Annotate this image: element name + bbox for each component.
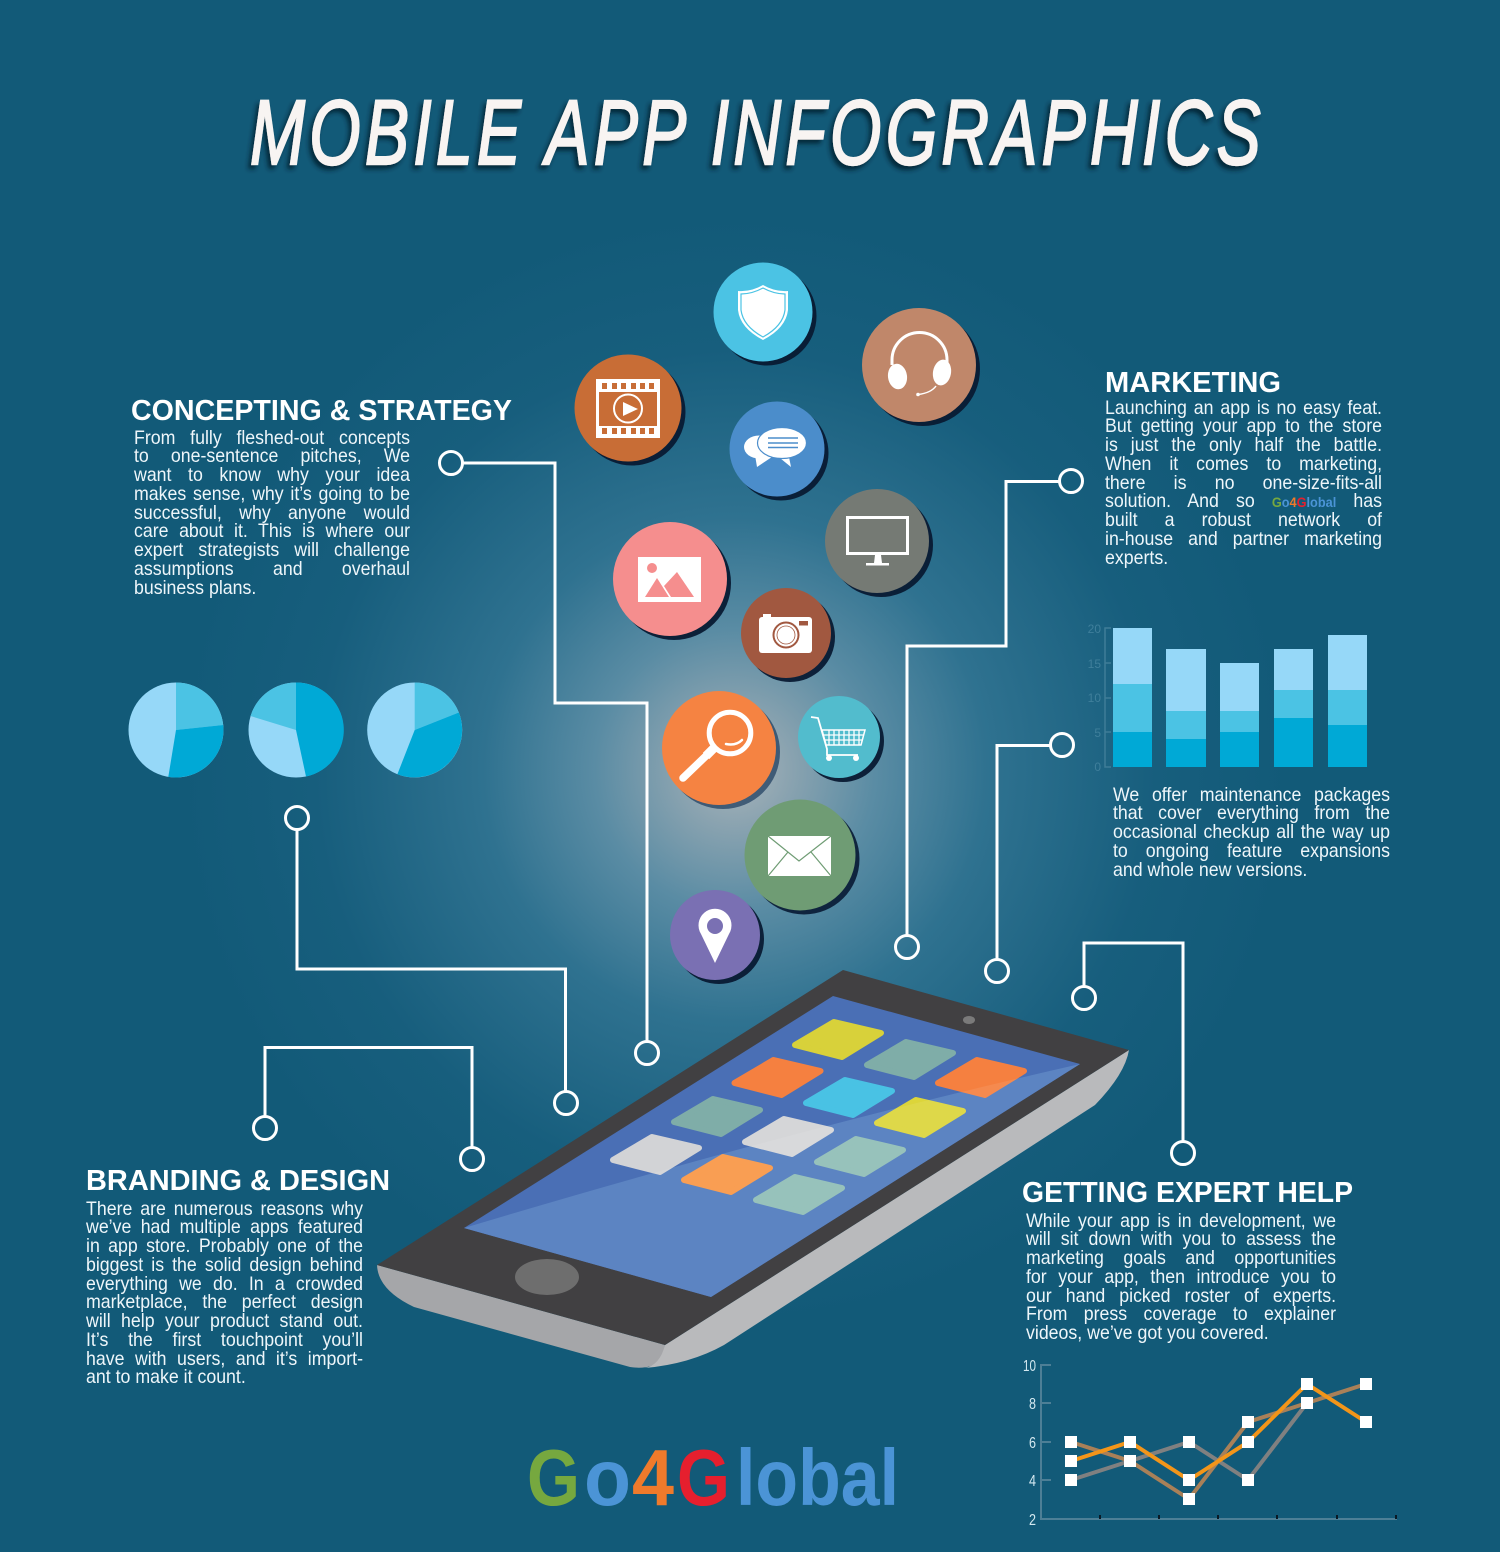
phone screen bbox=[464, 996, 1080, 1297]
text: marketing: experts. bbox=[1105, 546, 1168, 568]
text: branding and design: in app store. Probably one of the bbox=[86, 1235, 363, 1257]
connector: concepting to phone bbox=[440, 452, 658, 1064]
text: concepting and strategy: expert strategists will challenge bbox=[134, 539, 410, 561]
heading: marketing: MARKETING bbox=[1105, 367, 1281, 399]
text: getting expert help: While your app is in development, we bbox=[1026, 1210, 1336, 1232]
text: maintenance packages: to ongoing feature expansions bbox=[1113, 840, 1390, 862]
pie charts bbox=[128, 682, 462, 778]
stacked bar chart: 10 bbox=[1088, 691, 1101, 705]
icon: magnifier bbox=[662, 691, 780, 809]
icon: envelope bbox=[744, 800, 860, 914]
text: marketing: in-house and partner marketing bbox=[1105, 528, 1382, 550]
text: branding and design: will help your product stand out. bbox=[86, 1310, 363, 1332]
screen glare bbox=[464, 1064, 1080, 1297]
text: branding and design: marketplace, the perfect design bbox=[86, 1291, 363, 1313]
pie 3 bbox=[367, 682, 462, 778]
text: maintenance packages: and whole new versions. bbox=[1113, 858, 1307, 880]
text: getting expert help: our hand picked roster of experts. bbox=[1026, 1284, 1336, 1306]
stacked bar chart: 15 bbox=[1088, 657, 1101, 671]
text: marketing: Launching an app is no easy feat. bbox=[1105, 396, 1382, 418]
text: branding and design: It’s the first touchpoint you’ll bbox=[86, 1329, 363, 1351]
stacked bar chart bbox=[1088, 622, 1367, 774]
text: maintenance packages: occasional checkup all the way up bbox=[1113, 821, 1390, 843]
icon: chat bubbles bbox=[730, 402, 828, 500]
phone side: front edge bbox=[377, 1265, 665, 1368]
icon: shopping cart bbox=[798, 696, 884, 782]
connector: maintenance to phone bbox=[986, 734, 1074, 982]
text: getting expert help: marketing goals and opportunities bbox=[1026, 1247, 1336, 1269]
text: concepting and strategy: want to know why your idea bbox=[134, 464, 410, 486]
line chart: 6 bbox=[1029, 1435, 1036, 1452]
screen lower lit area bbox=[464, 1064, 1080, 1297]
connector: branding to phone bbox=[254, 1048, 484, 1170]
text: branding and design: biggest is the solid design behind bbox=[86, 1254, 363, 1276]
logo: Go4Global: G bbox=[527, 1433, 580, 1522]
connector: marketing to phone bbox=[896, 470, 1082, 958]
phone face bbox=[377, 970, 1129, 1345]
icon: headset bbox=[862, 308, 980, 426]
icon: shield bbox=[714, 262, 816, 366]
text: concepting and strategy: to one-sentence pitches, We bbox=[134, 445, 410, 467]
heading: getting expert help: GETTING EXPERT HELP bbox=[1022, 1177, 1353, 1209]
text: getting expert help: for your app, then introduce you to bbox=[1026, 1266, 1336, 1288]
icon: location pin bbox=[670, 890, 764, 984]
logo: Go4Global: 4 bbox=[632, 1433, 674, 1522]
line chart bbox=[1023, 1358, 1397, 1529]
text: marketing: solution. And so Go4Global has bbox=[1105, 490, 1382, 512]
text: getting expert help bbox=[1026, 1210, 1336, 1344]
logo: Go4Global: G bbox=[677, 1433, 730, 1522]
text: branding and design: There are numerous reasons why bbox=[86, 1198, 363, 1220]
icon: film bbox=[574, 354, 686, 466]
text: concepting and strategy: assumptions and overhaul bbox=[134, 558, 410, 580]
text: marketing: But getting your app to the store bbox=[1105, 415, 1382, 437]
heading: branding and design: BRANDING & DESIGN bbox=[86, 1165, 390, 1197]
text: marketing: built a robust network of bbox=[1105, 509, 1382, 531]
connector: pie charts to phone bbox=[286, 806, 578, 1114]
text: concepting and strategy: makes sense, why it’s going to be bbox=[134, 483, 410, 505]
phone side: right edge bbox=[645, 1050, 1129, 1368]
text: getting expert help: videos, we’ve got you covered. bbox=[1026, 1322, 1269, 1344]
front camera bbox=[963, 1016, 975, 1024]
logo: Go4Global bbox=[527, 1433, 899, 1522]
text: concepting and strategy: business plans. bbox=[134, 576, 256, 598]
text: concepting and strategy bbox=[134, 426, 410, 598]
line chart: 2 bbox=[1029, 1512, 1036, 1529]
text: getting expert help: From press coverage to explainer bbox=[1026, 1303, 1336, 1325]
text: concepting and strategy: care about it. This is where our bbox=[134, 520, 410, 542]
text: maintenance packages: We offer maintenance packages bbox=[1113, 784, 1390, 806]
text: concepting and strategy: From fully fleshed-out concepts bbox=[134, 426, 410, 448]
stacked bar chart: 20 bbox=[1088, 622, 1101, 636]
app tiles bbox=[613, 1022, 1024, 1212]
text: maintenance packages bbox=[1113, 784, 1390, 880]
text: marketing: there is no one-size-fits-all bbox=[1105, 472, 1382, 494]
text: branding and design bbox=[86, 1198, 363, 1388]
text: maintenance packages: that cover everything from the bbox=[1113, 802, 1390, 824]
pie 2 bbox=[248, 682, 344, 778]
text: concepting and strategy: successful, why anyone would bbox=[134, 502, 410, 524]
stacked bar chart: 0 bbox=[1094, 760, 1101, 774]
line chart: 10 bbox=[1023, 1358, 1036, 1375]
text: branding and design: have with users, and it’s import- bbox=[86, 1348, 363, 1370]
pie 1 bbox=[128, 682, 224, 778]
phone illustration bbox=[377, 970, 1129, 1368]
home button bbox=[515, 1259, 579, 1295]
logo: Go4Global: lobal bbox=[736, 1433, 899, 1522]
line chart: 8 bbox=[1029, 1396, 1036, 1413]
text: getting expert help: will sit down with you to assess the bbox=[1026, 1228, 1336, 1250]
logo: Go4Global: o bbox=[584, 1433, 631, 1522]
text: branding and design: we’ve had multiple apps featured bbox=[86, 1216, 363, 1238]
icon: picture bbox=[613, 522, 731, 640]
text: branding and design: ant to make it count. bbox=[86, 1366, 246, 1388]
connector: expert help to phone bbox=[1072, 943, 1194, 1164]
heading: concepting and strategy: CONCEPTING & STRATEGY bbox=[131, 395, 512, 427]
icon: monitor bbox=[825, 489, 933, 597]
text: marketing bbox=[1105, 396, 1382, 568]
text: marketing: When it comes to marketing, bbox=[1105, 453, 1382, 475]
icon: camera bbox=[741, 588, 835, 682]
stacked bar chart: 5 bbox=[1094, 726, 1101, 740]
line chart: 4 bbox=[1029, 1473, 1036, 1490]
text: branding and design: everything we do. In a crowded bbox=[86, 1272, 363, 1294]
text: marketing: is just the only half the battle. bbox=[1105, 434, 1382, 456]
